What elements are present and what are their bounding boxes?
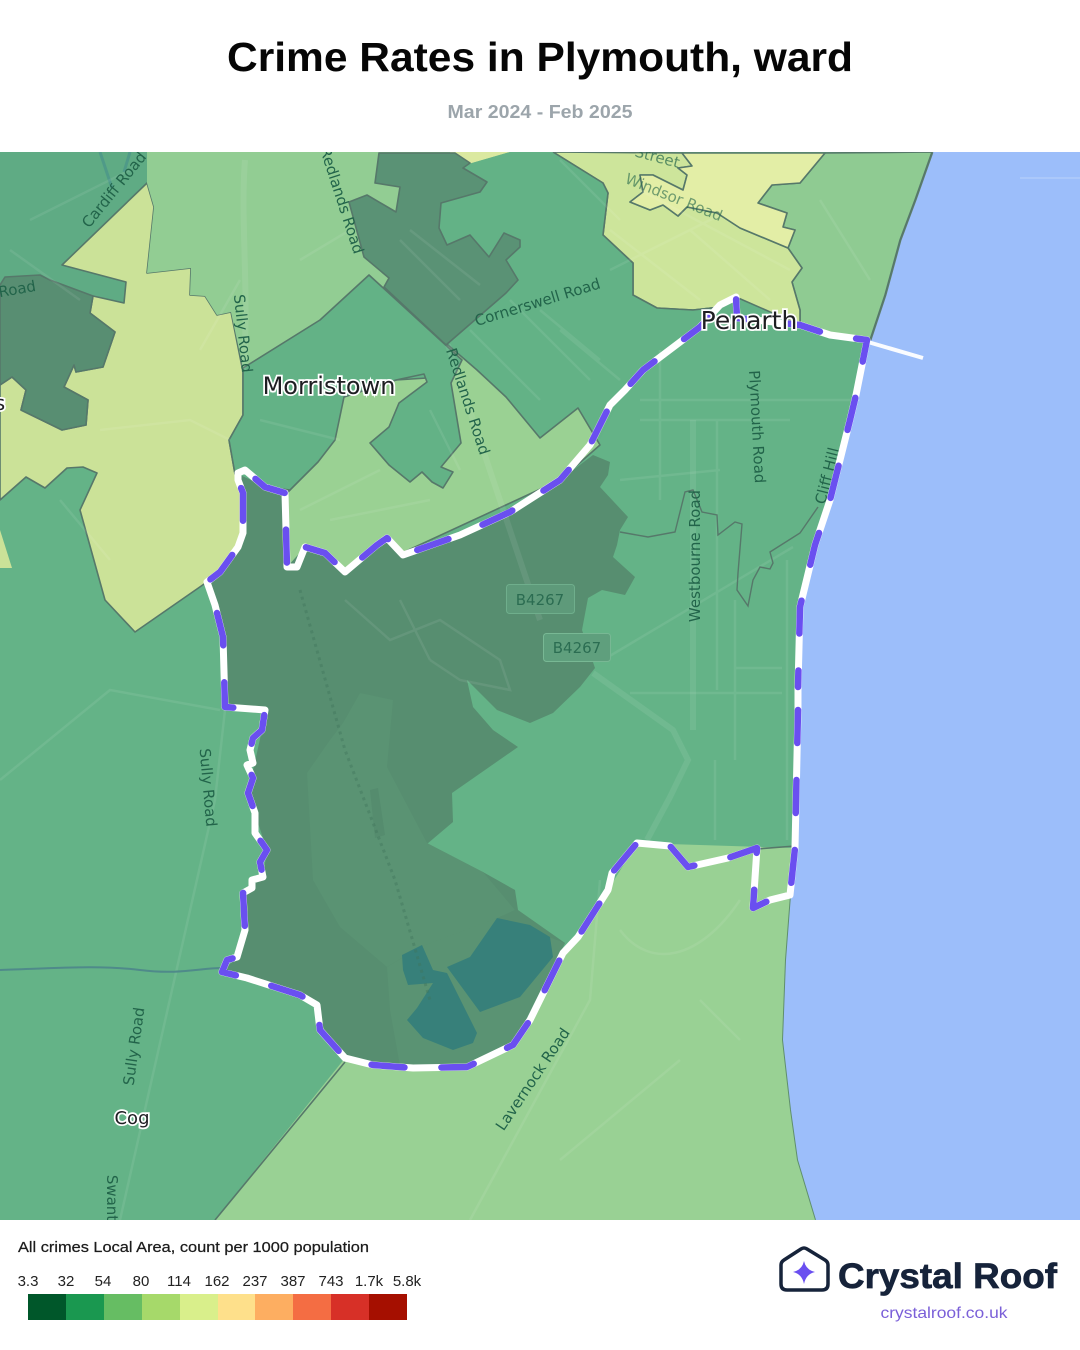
road labels: Swant <box>103 1175 121 1221</box>
area: Penarth centre, pale green <box>553 152 802 325</box>
area: north centre, light green <box>147 152 460 368</box>
place labels: Morristown <box>263 372 395 400</box>
legend scale labels: 80 <box>133 1273 149 1290</box>
website: crystalroof.co.uk <box>880 1305 1009 1322</box>
road labels: Street <box>633 143 682 172</box>
road labels: Sully Road <box>230 293 256 374</box>
sea <box>782 152 1080 1220</box>
area: west, pale green <box>0 183 243 632</box>
road labels: Windsor Road <box>623 170 725 225</box>
area: south of Morristown, light green <box>285 345 600 570</box>
road badge B4267: B4267 <box>516 591 564 609</box>
area: Morristown block with island, mid green <box>229 275 462 490</box>
road labels: Sully Road <box>196 748 220 828</box>
area: north centre, dark green <box>349 153 520 345</box>
legend colour bar <box>28 1294 407 1320</box>
road badge B4267 <box>506 584 574 614</box>
area: top-left, mid green <box>0 152 147 303</box>
area: far-left sliver <box>0 530 12 568</box>
legend scale labels: 162 <box>204 1273 230 1290</box>
road labels: Sully Road <box>120 1006 148 1087</box>
legend scale labels: 32 <box>58 1273 74 1290</box>
area: lake, teal <box>402 918 553 1050</box>
area: bottom-right, light green <box>215 843 815 1220</box>
road labels <box>0 143 843 1221</box>
road labels: Westbourne Road <box>686 490 704 622</box>
legend scale labels: 5.8k <box>393 1273 422 1290</box>
legend scale labels: 114 <box>167 1273 191 1290</box>
ward boundary <box>207 297 867 1068</box>
legend scale labels: 387 <box>280 1273 306 1290</box>
legend scale labels: 54 <box>95 1273 111 1290</box>
road labels: Cardiff Road <box>78 148 150 231</box>
legend scale labels: 743 <box>318 1273 344 1290</box>
place labels: Cog <box>114 1108 150 1129</box>
wordmark: Crystal Roof <box>838 1257 1057 1296</box>
road badge B4267 <box>544 634 610 662</box>
roads <box>0 160 870 1220</box>
road badge B4267: B4267 <box>553 639 601 657</box>
map <box>0 143 1080 1221</box>
legend <box>18 1239 422 1320</box>
road labels: Lavernock Road <box>492 1025 574 1134</box>
road labels: Redlands Road <box>442 346 493 457</box>
road labels: Cornerswell Road <box>473 275 603 330</box>
title: Crime Rates in Plymouth, ward <box>227 34 853 80</box>
area: top cream sliver <box>450 152 510 164</box>
legend scale labels: 3.3 <box>18 1273 38 1290</box>
area: ward, dark green <box>207 455 635 1068</box>
legend scale labels: 1.7k <box>355 1273 384 1290</box>
area: north-west, dark green <box>0 275 115 430</box>
area: north-east centre, mid green <box>440 152 712 311</box>
place labels: Penarth <box>701 306 797 335</box>
legend scale labels: 237 <box>242 1273 268 1290</box>
subtitle: date range: Mar 2024 - Feb 2025 <box>448 102 632 122</box>
pier <box>868 342 923 358</box>
area: ward lighter woodland <box>427 844 482 872</box>
legend scale labels <box>18 1273 422 1290</box>
legend title: All crimes Local Area, count per 1000 population <box>18 1239 369 1256</box>
road labels: Cliff Hill <box>811 446 843 506</box>
place labels <box>0 306 797 1129</box>
road labels: Redlands Road <box>316 145 367 256</box>
logo: Crystal Roof <box>781 1248 1057 1322</box>
thin district boundary, east <box>620 490 818 606</box>
road labels: Plymouth Road <box>745 370 769 484</box>
area: Windsor Road, pale yellow <box>630 153 825 248</box>
icon: house with star <box>781 1248 828 1290</box>
area: north-east coast, light green <box>758 152 932 340</box>
